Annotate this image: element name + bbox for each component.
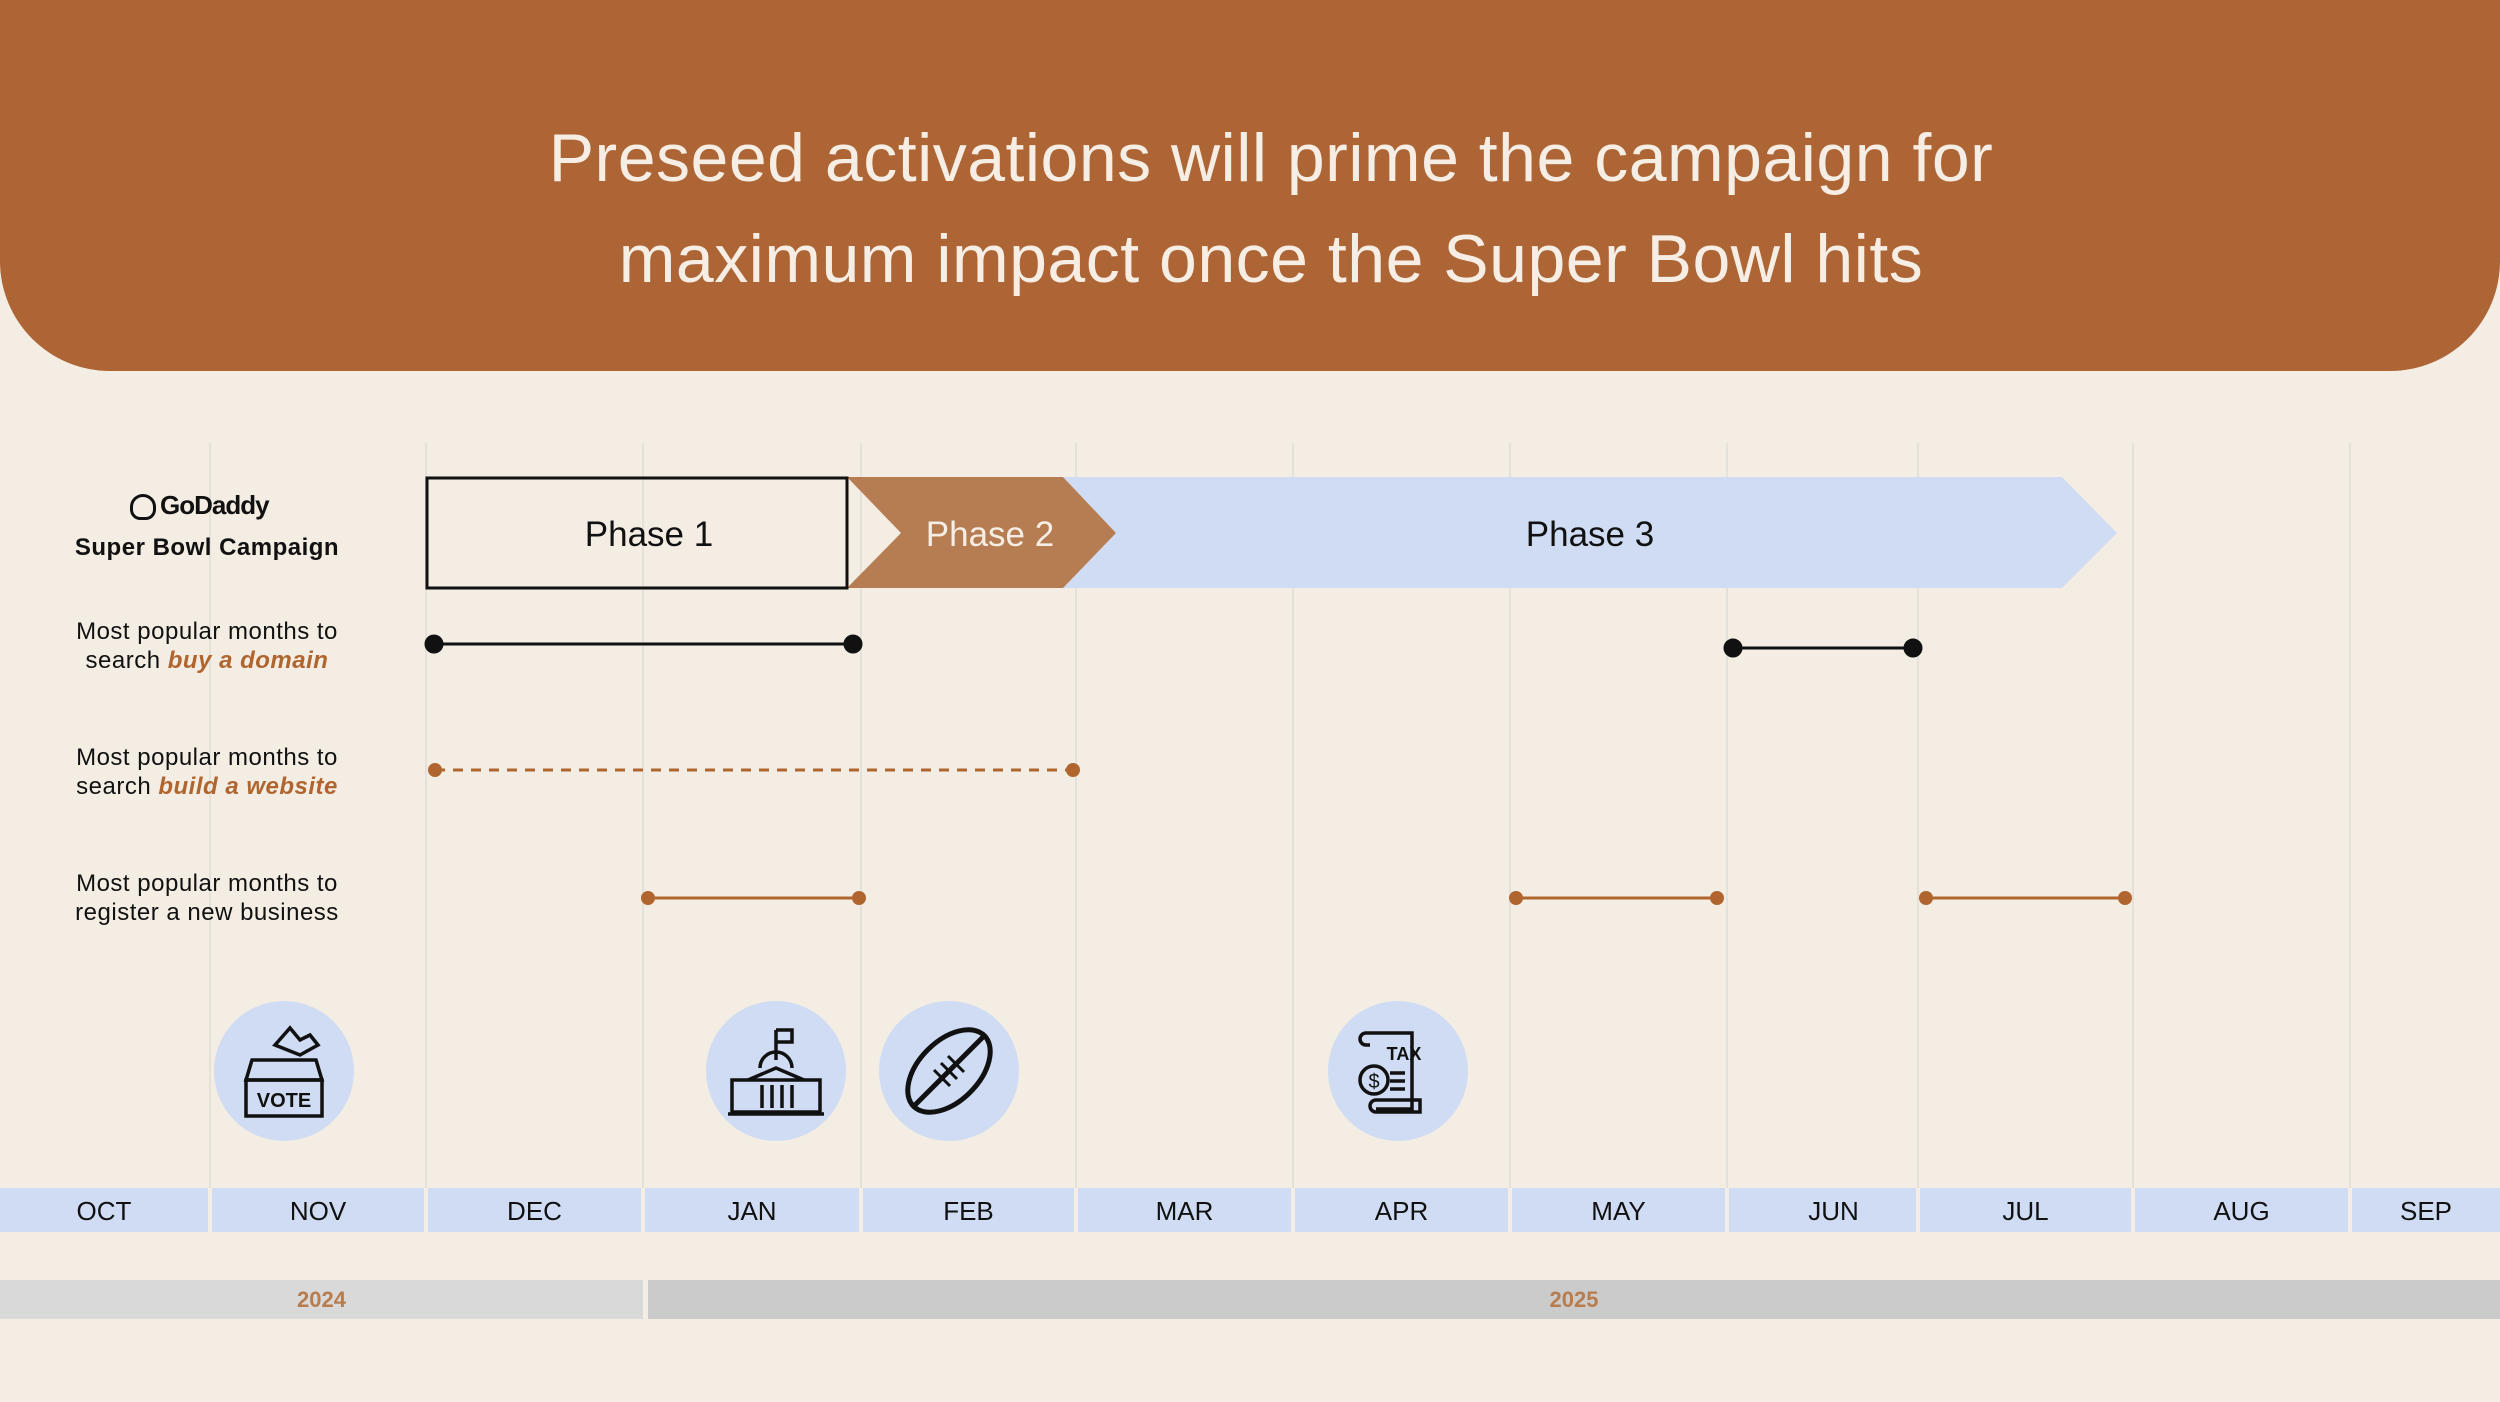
website search dashed line xyxy=(428,763,1080,777)
month axis: NOV xyxy=(290,1196,346,1226)
month axis: AUG xyxy=(2213,1196,2270,1226)
month axis: FEB xyxy=(943,1196,994,1226)
month axis: SEP xyxy=(2400,1196,2452,1226)
phase 3: Phase 3 xyxy=(1526,515,1654,554)
label: build a website xyxy=(76,744,338,800)
month axis: MAY xyxy=(1591,1196,1646,1226)
month axis: JAN xyxy=(727,1196,777,1226)
month axis: OCT xyxy=(77,1196,131,1226)
year bar 2025: 2025 xyxy=(1550,1287,1598,1312)
label: buy a domain: Most popular months to xyxy=(76,618,338,645)
month axis: JUN xyxy=(1808,1196,1859,1226)
title: maximum impact once the Super Bowl hits xyxy=(619,221,1923,297)
label: register business xyxy=(75,870,339,926)
label: register business: register a new business xyxy=(75,899,339,926)
icon: capitol xyxy=(706,1001,846,1141)
icon: vote xyxy=(214,1001,354,1141)
icon: tax: TAX xyxy=(1387,1044,1421,1064)
business registration lines xyxy=(641,891,2132,905)
label: buy a domain xyxy=(76,618,338,674)
icon: vote: VOTE xyxy=(257,1090,311,1112)
icon: tax xyxy=(1328,1001,1468,1141)
icon: football xyxy=(879,1001,1019,1141)
header banner xyxy=(0,0,2500,371)
phase 2 xyxy=(847,477,1116,588)
title: Preseed activations will prime the campaign for xyxy=(549,120,1993,196)
phase 2: Phase 2 xyxy=(926,515,1054,554)
title xyxy=(549,120,1993,297)
label: campaign: Super Bowl Campaign xyxy=(75,534,339,561)
month axis xyxy=(0,1188,2500,1232)
month axis: DEC xyxy=(507,1196,562,1226)
icon: tax: $ xyxy=(1368,1071,1380,1093)
year bar 2025 xyxy=(648,1280,2500,1319)
label: build a website: Most popular months to xyxy=(76,744,338,771)
label: buy a domain: search buy a domain xyxy=(86,647,328,674)
label: build a website: search build a website xyxy=(76,773,338,800)
year bar 2024 xyxy=(0,1280,643,1319)
month axis: JUL xyxy=(2002,1196,2049,1226)
domain search lines xyxy=(426,636,1921,656)
phase 3 xyxy=(1063,477,2117,588)
phase 1 xyxy=(427,478,847,588)
godaddy logo: GoDaddy xyxy=(160,490,269,520)
label: register business: Most popular months to xyxy=(76,870,338,897)
month axis: APR xyxy=(1375,1196,1428,1226)
month axis: MAR xyxy=(1156,1196,1213,1226)
year bar 2024: 2024 xyxy=(297,1287,346,1312)
phase 1: Phase 1 xyxy=(585,515,713,554)
